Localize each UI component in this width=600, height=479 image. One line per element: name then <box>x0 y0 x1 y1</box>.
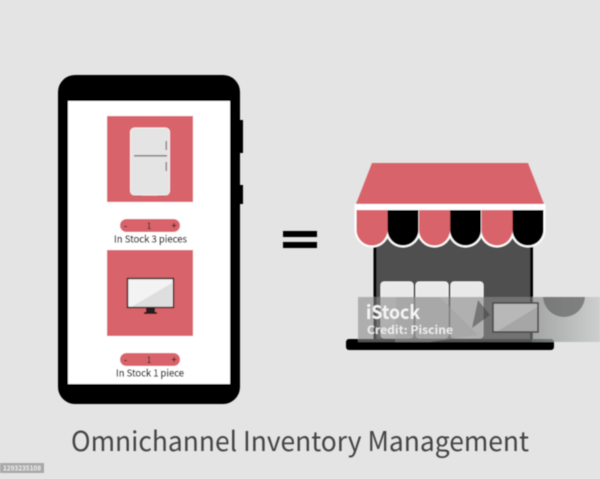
quantity stepper: television: - <box>124 353 127 366</box>
quantity stepper: refrigerator <box>120 219 180 232</box>
phone screen <box>68 101 230 384</box>
quantity stepper: refrigerator: 1 <box>146 219 152 232</box>
smartphone <box>58 75 243 404</box>
storefront <box>346 163 554 350</box>
awning scallops <box>356 210 544 245</box>
quantity stepper: television <box>120 353 180 366</box>
quantity stepper: refrigerator: - <box>124 219 127 232</box>
awning roof <box>356 163 544 204</box>
quantity stepper: television: 1 <box>146 353 152 366</box>
stock label: television: In Stock 1 piece <box>116 366 184 380</box>
watermark logo: iStock <box>366 298 420 325</box>
product tile: refrigerator <box>107 116 193 202</box>
stock label: refrigerator: In Stock 3 pieces <box>114 232 188 246</box>
watermark credit: Credit: Piscine <box>367 322 453 338</box>
equals sign <box>283 231 317 248</box>
stock image id tag: 1293235108 <box>3 464 41 474</box>
shop windows <box>381 282 483 338</box>
watermark television <box>493 303 538 332</box>
quantity stepper: refrigerator: + <box>171 219 177 232</box>
store floor <box>346 339 554 350</box>
watermark band <box>357 296 600 343</box>
title: Omnichannel Inventory Management <box>71 420 529 459</box>
product tile: television <box>107 250 193 336</box>
icon: television <box>128 278 174 314</box>
quantity stepper: television: + <box>171 353 177 366</box>
icon: refrigerator <box>130 128 170 196</box>
awning white strip and scallop outline <box>356 206 544 245</box>
building <box>374 235 533 340</box>
